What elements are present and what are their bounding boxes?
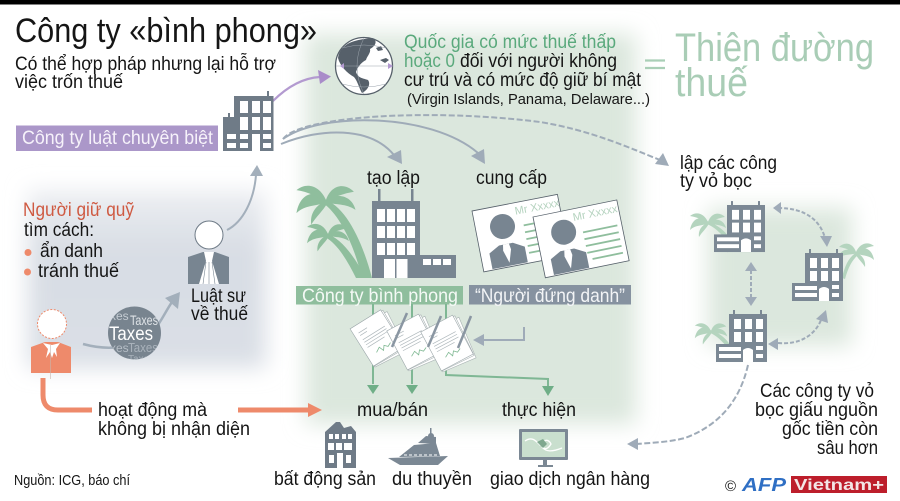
heading: tax haven: Thiên đường	[675, 26, 874, 70]
equals sign	[645, 60, 665, 68]
icon: taxes word circle: Taxes	[130, 312, 158, 328]
icon: taxes word circle: Taxes	[128, 340, 158, 355]
label: tax lawyer	[191, 286, 248, 325]
text block: shell companies hide money: gốc tiền còn	[782, 419, 878, 440]
arrow: undetected activities	[43, 378, 322, 417]
icon: taxes word circle: Taxes	[128, 354, 154, 365]
icon: taxes word circle	[108, 306, 161, 365]
icon: nominee ID card 1: Mr Xxxxx	[514, 197, 561, 218]
label: front company: Công ty bình phong	[302, 285, 458, 307]
icon: contract documents	[350, 307, 479, 375]
icon: nominee ID card 2	[533, 200, 629, 278]
panel: fund holder grey background	[28, 190, 266, 368]
top black bar	[0, 0, 900, 4]
text block: tax haven definition: hoặc 0	[404, 51, 455, 72]
label: yacht: du thuyền	[392, 469, 472, 490]
icon: globe	[336, 38, 393, 94]
label: execute: thực hiện	[502, 400, 576, 421]
arrow: provides nominee	[283, 120, 485, 164]
icon: fund holder person	[31, 310, 71, 379]
text block: shell companies hide money: Các công ty vỏ	[760, 381, 874, 402]
icon: nominee ID card 1	[472, 194, 570, 272]
arrows: dashed links between shell companies	[745, 202, 832, 350]
icon: palm trees	[296, 186, 372, 278]
label: undetected activities: không bị nhận diện	[98, 419, 250, 440]
label: provide: cung cấp	[476, 168, 547, 189]
subtitle: Có thể hợp pháp nhưng lại hỗ trợ	[15, 52, 276, 75]
text block: tax haven definition: (Virgin Islands, Panama, Delaware...)	[407, 92, 650, 108]
label: specialised law firm: Công ty luật chuyên biệt	[22, 127, 214, 149]
subtitle: việc trốn thuế	[15, 71, 123, 93]
label: set up shell companies: ty vỏ bọc	[680, 171, 752, 192]
icon: yacht	[388, 428, 448, 465]
icon: taxes word circle: xes	[110, 341, 129, 355]
icon: shell company C	[716, 310, 767, 362]
text block: shell companies hide money: bọc giấu nguồn	[755, 400, 878, 421]
text block: fund holder	[23, 200, 134, 282]
icon: shell company A	[714, 201, 765, 252]
icon: shell company palms	[690, 213, 874, 347]
text block: tax haven definition: Quốc gia có mức thuế thấp	[404, 32, 616, 53]
logo: AFP Vietnam+: AFP	[741, 475, 787, 495]
label: set up shell companies	[680, 153, 777, 192]
text block: shell companies hide money	[755, 381, 878, 459]
label: nominee: “Người đứng danh”	[475, 285, 625, 307]
heading: tax haven	[675, 26, 874, 105]
label: real estate: bất động sản	[274, 469, 376, 490]
subtitle	[15, 52, 276, 93]
text block: tax haven definition	[404, 32, 650, 108]
icon: nominee ID card 2: Mr Xxxxx	[572, 203, 619, 224]
arrow: creates front company	[281, 132, 402, 164]
text block: fund holder: Người giữ quỹ	[23, 200, 134, 221]
title: Công ty «bình phong»	[15, 12, 317, 50]
icon: taxes word circle: xes	[110, 309, 129, 323]
label: buy and sell: mua/bán	[357, 400, 428, 421]
arrows: front company to transactions	[367, 304, 554, 396]
text block: tax haven definition: cư trú và có mức độ giữ bí mật	[404, 70, 642, 91]
arrow: dashed to bank transactions	[627, 365, 748, 450]
icon: law firm building	[223, 91, 274, 151]
icon: taxes word circle: Taxes	[109, 324, 153, 345]
arrow: dashed to shell companies	[283, 115, 669, 166]
label: create: tạo lập	[367, 168, 420, 189]
arrow: holder to lawyer	[83, 292, 180, 348]
logo: AFP Vietnam+	[725, 475, 887, 495]
label: undetected activities: hoạt động mà	[98, 400, 207, 421]
source: Nguồn: ICG, báo chí	[14, 473, 130, 489]
label: tax lawyer: về thuế	[191, 304, 248, 325]
arrow: law firm to globe	[273, 70, 331, 101]
text block: fund holder: ẩn danh	[40, 241, 103, 262]
label: bank transactions: giao dịch ngân hàng	[490, 469, 650, 490]
icon: lawyer	[188, 221, 229, 284]
icon: front company building	[372, 189, 456, 278]
icon: real estate house	[325, 422, 356, 468]
logo: AFP Vietnam+: Vietnam+	[794, 477, 884, 494]
arrow: lawyer to law firm	[227, 165, 263, 230]
label: tax lawyer: Luật sư	[191, 286, 246, 307]
logo: AFP Vietnam+: ©	[725, 478, 736, 495]
panel: tax haven green background	[306, 34, 636, 424]
heading: tax haven: thuế	[675, 61, 748, 105]
label: undetected activities	[98, 400, 250, 440]
text block: fund holder: tránh thuế	[38, 261, 119, 282]
icon: shell company B	[792, 249, 843, 301]
arrow: nominee to documents	[473, 327, 524, 346]
icon: bank monitor	[519, 429, 568, 467]
panel: shell companies green background	[708, 208, 852, 346]
text block: shell companies hide money: sâu hơn	[817, 438, 878, 459]
label: set up shell companies: lập các công	[680, 153, 777, 174]
text block: tax haven definition: đối với người không	[460, 51, 617, 72]
text block: fund holder: tìm cách:	[24, 220, 94, 241]
